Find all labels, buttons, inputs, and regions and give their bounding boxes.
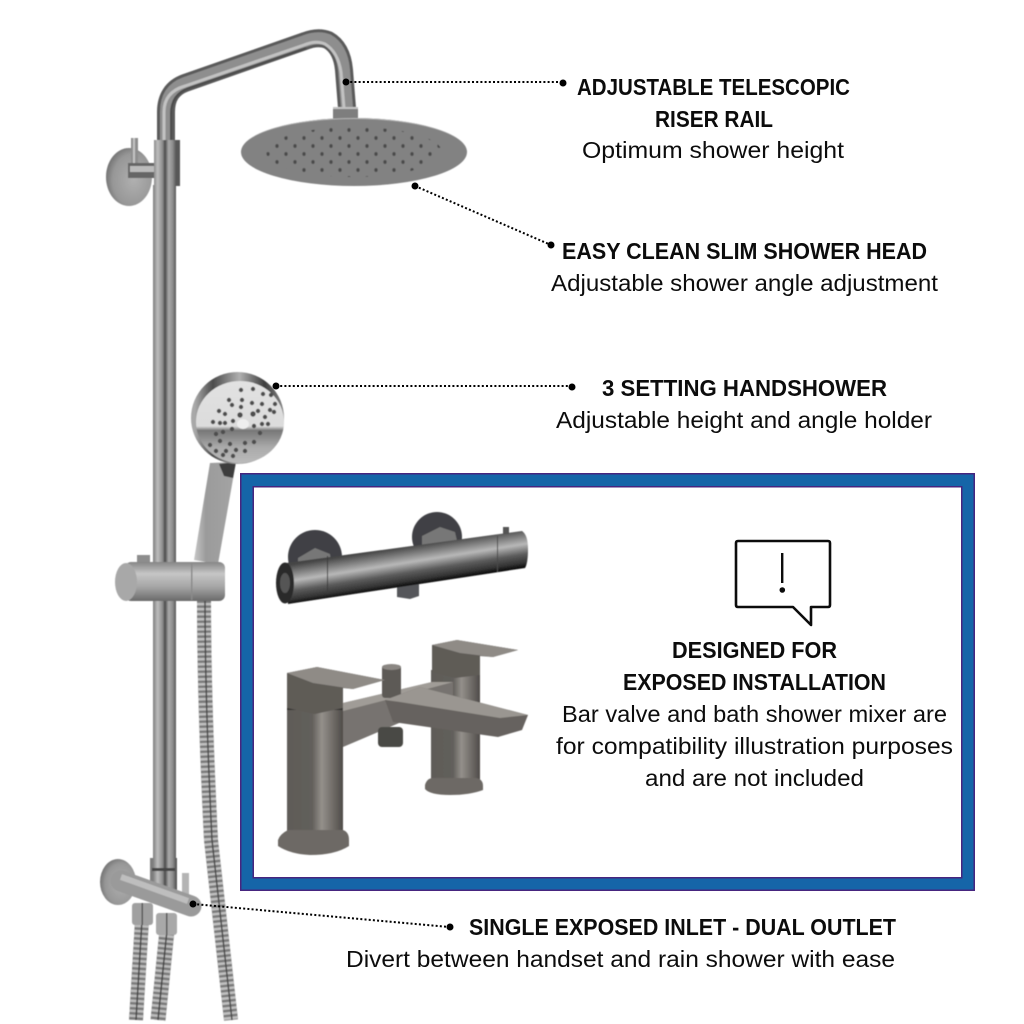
handshower (191, 372, 284, 564)
right column (431, 670, 480, 782)
dotted leader: riser rail (342, 78, 566, 86)
panel heading and note: and are not included (645, 765, 864, 791)
callout: adjustable telescopic riser rail: ADJUSTABLE TELESCOPIC (577, 74, 850, 100)
callout: easy clean slim shower head: EASY CLEAN SLIM SHOWER HEAD (562, 238, 927, 264)
callout: 3 setting handshower: Adjustable height and angle holder (556, 407, 932, 433)
panel: exposed installation (240, 473, 975, 891)
callout: 3 setting handshower: 3 SETTING HANDSHOWER (602, 375, 887, 401)
callout: easy clean slim shower head (551, 238, 939, 296)
callout: single exposed inlet dual outlet (346, 914, 896, 972)
flexible hose to handset (204, 598, 232, 1020)
left column (287, 700, 343, 834)
callout: easy clean slim shower head: Adjustable shower angle adjustment (551, 270, 939, 296)
callout: single exposed inlet dual outlet: Divert between handset and rain shower with ease (346, 946, 895, 972)
handle (194, 462, 236, 564)
riser rail (153, 185, 176, 860)
wall bracket (106, 138, 160, 206)
shower column product image (100, 38, 467, 1020)
callout: adjustable telescopic riser rail (577, 74, 850, 163)
telescopic sleeve (154, 140, 180, 186)
under nut (378, 727, 403, 747)
dotted leader: inlet (190, 900, 454, 930)
panel heading and note (556, 637, 953, 791)
panel frame (240, 473, 975, 891)
panel heading and note: EXPOSED INSTALLATION (623, 669, 886, 695)
panel heading and note: Bar valve and bath shower mixer are (562, 701, 947, 727)
bar valve (276, 512, 528, 604)
dotted leader: shower head (412, 182, 554, 248)
diverter knob (382, 665, 401, 698)
spray head (191, 372, 284, 464)
callout: adjustable telescopic riser rail: Optimum shower height (582, 137, 845, 163)
riser arm (164, 38, 347, 142)
bath shower mixer (278, 640, 528, 855)
inlet diverter (100, 858, 191, 1020)
dotted leader: handshower (272, 382, 576, 390)
callout: adjustable telescopic riser rail: RISER RAIL (655, 106, 773, 132)
panel heading and note: DESIGNED FOR (672, 637, 837, 663)
bridge (343, 682, 453, 747)
spout (385, 687, 528, 737)
lower hoses (136, 920, 167, 1020)
shower head (241, 107, 467, 186)
icon: alert speech bubble (736, 541, 830, 625)
callout: 3 setting handshower (556, 375, 932, 433)
callout: single exposed inlet dual outlet: SINGLE EXPOSED INLET - DUAL OUTLET (469, 914, 896, 940)
sliding holder (115, 555, 225, 601)
panel heading and note: for compatibility illustration purposes (556, 733, 953, 759)
